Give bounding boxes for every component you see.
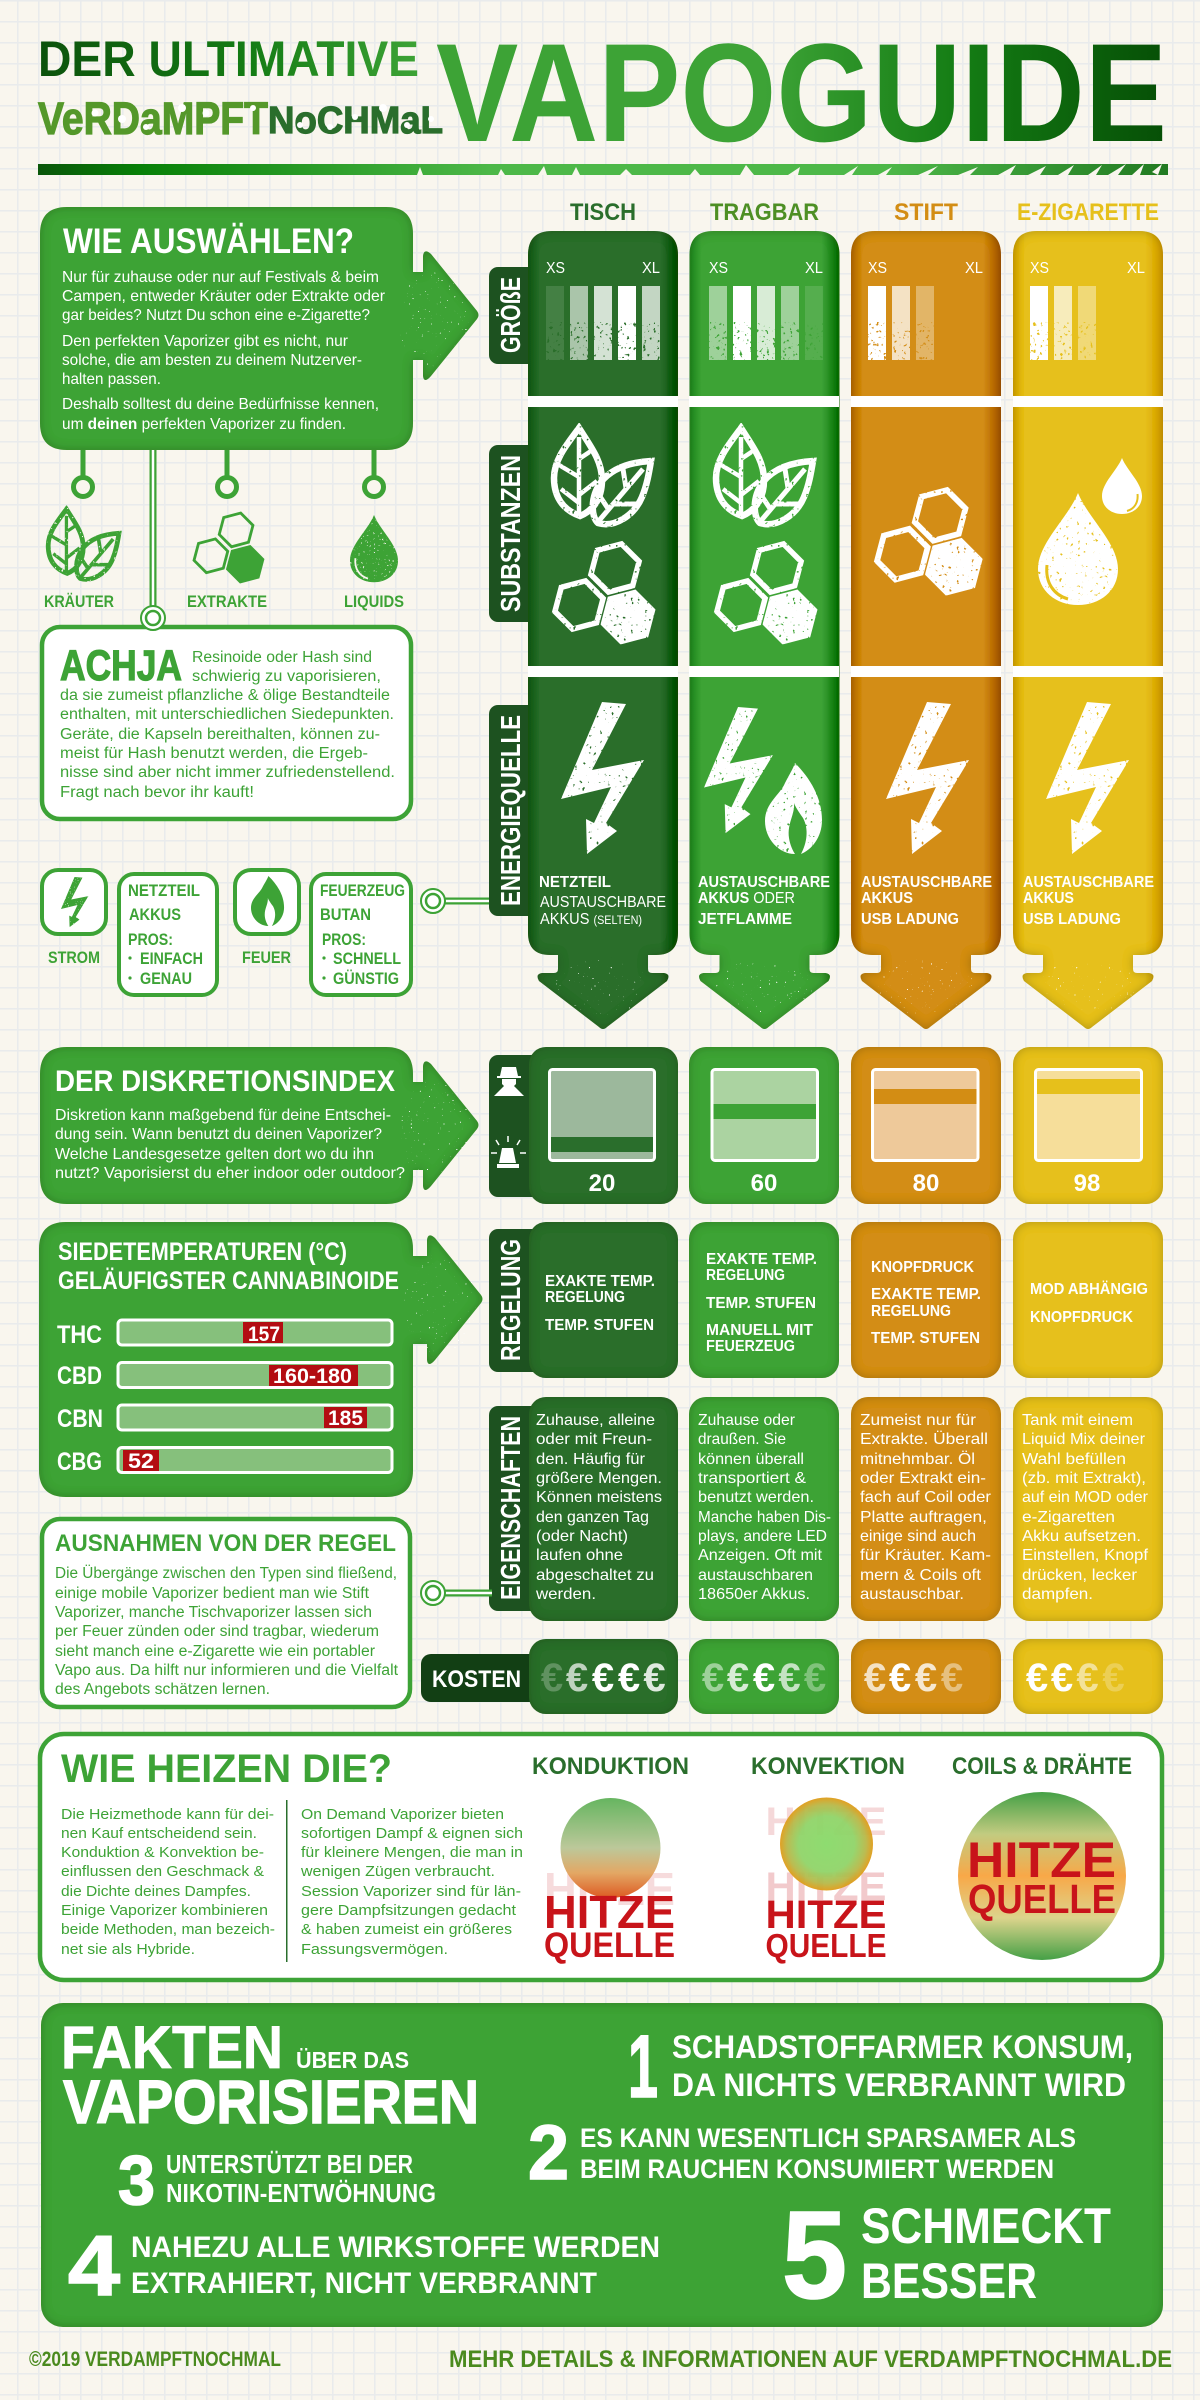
text: e-zigarette: MOD ABHÄNGIG bbox=[1030, 1281, 1148, 1298]
panel: diskretionsindex: Welche Landesgesetze gelten dort wo du ihn bbox=[55, 1146, 374, 1163]
body text: da sie zumeist pflanzliche & ölige Bestandteile bbox=[60, 687, 390, 704]
kosten: stift: € bbox=[864, 1656, 886, 1700]
text: stift: EXAKTE TEMP. bbox=[871, 1286, 981, 1303]
cell: tisch 20: 20 bbox=[589, 1170, 615, 1197]
column: tisch bbox=[528, 231, 678, 1029]
text column left: net sie als Hybride. bbox=[61, 1941, 195, 1958]
discretion cells bbox=[529, 1047, 1163, 1204]
fact 2 bbox=[528, 2110, 1076, 2196]
text: stift: KNOPFDRUCK bbox=[871, 1259, 975, 1276]
bar: cbn 185 bbox=[57, 1405, 392, 1433]
panel: netzteil: AKKUS bbox=[129, 906, 181, 924]
eigenschaften: tragbar: 18650er Akkus. bbox=[698, 1586, 810, 1603]
kosten: e-zigarette: € bbox=[1051, 1656, 1073, 1700]
diagram: konvektion: HITZE bbox=[766, 1800, 886, 1844]
fact 2: ES KANN WESENTLICH SPARSAMER ALS bbox=[580, 2123, 1076, 2153]
eigenschaften: e-zigarette: Liquid Mix deiner bbox=[1022, 1431, 1146, 1448]
column: e-zigarette: XL bbox=[1127, 260, 1145, 277]
text: tisch bbox=[545, 1273, 655, 1334]
label: substanzen: SUBSTANZEN bbox=[495, 455, 526, 612]
bar: cbn 185: 185 bbox=[328, 1407, 363, 1430]
column: tragbar: AKKUS ODER bbox=[698, 890, 795, 907]
fact 4: EXTRAHIERT, NICHT VERBRANNT bbox=[131, 2267, 597, 2300]
text: e-zigarette bbox=[1030, 1281, 1148, 1326]
heading: WIE HEIZEN DIE? bbox=[61, 1747, 392, 1791]
fact 1: DA NICHTS VERBRANNT WIRD bbox=[672, 2067, 1126, 2103]
panel: feuerzeug: BUTAN bbox=[320, 906, 371, 924]
panel: strom: STROM bbox=[48, 949, 100, 967]
column: stift: USB LADUNG bbox=[861, 911, 959, 928]
text column right: On Demand Vaporizer bieten bbox=[301, 1806, 504, 1823]
heading: VAPORISIEREN bbox=[63, 2068, 479, 2136]
panel: ausnahmen von der regel: Die Übergänge zwischen den Typen sind fließend, bbox=[55, 1564, 397, 1582]
text column right: wenigen Zügen verbraucht. bbox=[300, 1863, 495, 1880]
icon: extrakte bbox=[187, 513, 267, 611]
panel: diskretionsindex bbox=[40, 1047, 478, 1204]
kosten: stift bbox=[851, 1639, 1001, 1714]
panel: ausnahmen von der regel: per Feuer zünden oder sind tragbar, wiederum bbox=[55, 1623, 379, 1640]
panel: netzteil: NETZTEIL bbox=[128, 882, 200, 900]
eigenschaften: tragbar bbox=[689, 1397, 839, 1621]
column: e-zigarette: USB LADUNG bbox=[1023, 911, 1121, 928]
eigenschaften: tragbar: können überall bbox=[698, 1451, 804, 1468]
eigenschaften: tisch: größere Mengen. bbox=[536, 1470, 662, 1487]
text column right: & haben zumeist ein größeres bbox=[301, 1921, 512, 1938]
column: tragbar bbox=[689, 231, 840, 1029]
eigenschaften: stift: für Kräuter. Kam- bbox=[860, 1547, 991, 1564]
panel: diskretionsindex: Diskretion kann maßgebend für deine Entschei- bbox=[55, 1107, 391, 1124]
column: tisch: AUSTAUSCHBARE bbox=[540, 894, 666, 911]
title underline bar bbox=[38, 164, 1168, 175]
text column left bbox=[61, 1806, 275, 1958]
column: e-zigarette: AKKUS bbox=[1023, 890, 1074, 907]
cell: e-zigarette 98: 98 bbox=[1074, 1170, 1100, 1197]
icon: extrakte: EXTRAKTE bbox=[187, 592, 267, 611]
text column right: sofortigen Dampf & eignen sich bbox=[301, 1825, 523, 1842]
panel: siedetemperaturen: GELÄUFIGSTER CANNABINOIDE bbox=[58, 1267, 399, 1295]
heading: ÜBER DAS bbox=[296, 2047, 409, 2073]
kosten: tisch: € bbox=[541, 1656, 563, 1700]
eigenschaften: tisch: werden. bbox=[535, 1586, 596, 1603]
text: tisch: EXAKTE TEMP. bbox=[545, 1273, 655, 1290]
fact 2: BEIM RAUCHEN KONSUMIERT WERDEN bbox=[580, 2154, 1054, 2184]
diagram: coils und draehte: QUELLE bbox=[968, 1876, 1116, 1922]
bar: cbg 52 bbox=[57, 1448, 392, 1476]
row tabs bbox=[489, 267, 549, 1611]
bar: cbd 160-180 bbox=[57, 1362, 392, 1390]
icon: liquids bbox=[344, 515, 404, 611]
panel: diskretionsindex: DER DISKRETIONSINDEX bbox=[55, 1065, 395, 1098]
panel: feuerzeug: PROS: bbox=[322, 931, 366, 949]
column headers: TRAGBAR bbox=[710, 199, 819, 226]
text column left: einflussen den Geschmack & bbox=[61, 1863, 264, 1880]
eigenschaften: stift: einige sind auch bbox=[860, 1528, 976, 1545]
kosten: e-zigarette bbox=[1013, 1639, 1163, 1714]
panel: ausnahmen von der regel: einige mobile Vaporizer bedient man wie Stift bbox=[55, 1585, 370, 1602]
arrow specks bbox=[399, 270, 471, 370]
text column left: Konduktion & Konvektion be- bbox=[61, 1844, 264, 1861]
bar: thc 157 bbox=[57, 1320, 392, 1349]
kosten: tisch: € bbox=[566, 1656, 588, 1700]
fact 2: 2 bbox=[528, 2110, 569, 2196]
eigenschaften: tisch bbox=[529, 1397, 678, 1621]
text: tragbar: FEUERZEUG bbox=[706, 1338, 795, 1355]
column: tragbar: JETFLAMME bbox=[698, 911, 792, 928]
eigenschaften: stift: mern & Coils oft bbox=[860, 1567, 982, 1584]
cell: tragbar 60: 60 bbox=[751, 1170, 777, 1197]
eigenschaften: e-zigarette: Einstellen, Knopf bbox=[1022, 1547, 1149, 1564]
kosten: tragbar: € bbox=[702, 1656, 724, 1700]
column: e-zigarette bbox=[1013, 231, 1163, 1029]
panel: wie auswaehlen bbox=[40, 207, 478, 496]
intro text bbox=[62, 269, 386, 433]
cell: stift 80: 80 bbox=[913, 1170, 939, 1197]
fact 5: 5 bbox=[782, 2187, 847, 2325]
eigenschaften: e-zigarette: Wahl befüllen bbox=[1022, 1451, 1126, 1468]
column: tisch: AKKUS (SELTEN) bbox=[540, 911, 642, 928]
text column right: gere Dampfsitzungen gedacht bbox=[301, 1902, 517, 1919]
panel: achja bbox=[42, 606, 411, 819]
text: e-zigarette: KNOPFDRUCK bbox=[1030, 1309, 1134, 1326]
kosten: stift: € bbox=[915, 1656, 937, 1700]
kosten: tisch: € bbox=[618, 1656, 640, 1700]
panel: ausnahmen von der regel: des Angebots schätzen lernen. bbox=[55, 1681, 270, 1698]
fact 4: 4 bbox=[68, 2219, 120, 2314]
icon: agent bbox=[494, 1067, 524, 1096]
eigenschaften: stift bbox=[851, 1397, 1001, 1621]
panel: siedetemperaturen: SIEDETEMPERATUREN (°C) bbox=[58, 1238, 347, 1266]
kosten: stift: € bbox=[941, 1656, 963, 1700]
panel: ausnahmen von der regel: Vapo aus. Da hilft nur informieren und die Vielfalt bbox=[55, 1662, 399, 1679]
intro text: Nur für zuhause oder nur auf Festivals & beim bbox=[62, 269, 379, 286]
intro text: um deinen perfekten Vaporizer zu finden. bbox=[62, 416, 346, 433]
text column right bbox=[300, 1806, 523, 1958]
bar: cbd 160-180: 160-180 bbox=[273, 1365, 352, 1388]
eigenschaften: stift: Extrakte. Überall bbox=[860, 1430, 988, 1448]
eigenschaften: tisch: Können meistens bbox=[536, 1489, 662, 1506]
fact 4 bbox=[68, 2219, 660, 2314]
panel: ausnahmen von der regel: Vaporizer, manche Tischvaporizer lassen sich bbox=[55, 1604, 372, 1621]
logo: verdampftnochmal: NoCHMaL bbox=[268, 100, 443, 142]
icon: kraeuter: KRÄUTER bbox=[44, 592, 114, 611]
body text: Resinoide oder Hash sind bbox=[192, 649, 372, 666]
eigenschaften: tisch: Zuhause, alleine bbox=[536, 1412, 655, 1429]
panel: ausnahmen von der regel: sieht manch eine e-Zigarette wie ein portabler bbox=[55, 1643, 375, 1660]
diagram: coils und draehte bbox=[952, 1753, 1132, 1960]
column: stift: AKKUS bbox=[861, 890, 913, 907]
column: tisch: XS bbox=[546, 260, 565, 277]
text: stift: REGELUNG bbox=[871, 1303, 951, 1320]
kosten: e-zigarette: € bbox=[1102, 1656, 1125, 1700]
column: stift: XS bbox=[868, 260, 887, 277]
kosten: e-zigarette: € bbox=[1026, 1656, 1048, 1700]
fact 3 bbox=[118, 2141, 436, 2219]
panel: diskretionsindex: dung sein. Wann benutzt du deinen Vaporizer? bbox=[55, 1126, 382, 1143]
regelung label: REGELUNG bbox=[495, 1239, 526, 1361]
size bars bbox=[868, 286, 934, 360]
heading: WIE AUSWÄHLEN? bbox=[63, 222, 354, 261]
text column left: nen Kauf entscheidend sein. bbox=[61, 1825, 257, 1842]
size bars bbox=[1030, 286, 1096, 360]
body text: Geräte, die Kapseln bereithalten, können zu- bbox=[60, 726, 380, 743]
eigenschaften: e-zigarette bbox=[1013, 1397, 1163, 1621]
eigenschaften: stift: Zumeist nur für bbox=[860, 1412, 977, 1429]
bar: cbd 160-180: CBD bbox=[57, 1362, 102, 1390]
body text: enthalten, mit unterschiedlichen Siedepunkten. bbox=[60, 706, 394, 723]
text: tisch: REGELUNG bbox=[545, 1289, 625, 1306]
eigenschaften: tisch: abgeschaltet zu bbox=[536, 1567, 654, 1584]
kosten: e-zigarette: € bbox=[1076, 1656, 1099, 1700]
text: tragbar: TEMP. STUFEN bbox=[706, 1295, 816, 1312]
size bars bbox=[709, 286, 823, 360]
eigenschaften: tragbar: Manche haben Dis- bbox=[698, 1509, 831, 1526]
text column right: Session Vaporizer sind für län- bbox=[301, 1883, 521, 1900]
text: tragbar: MANUELL MIT bbox=[706, 1322, 814, 1339]
eigenschaften: stift: fach auf Coil oder bbox=[860, 1489, 992, 1506]
column: tragbar: XS bbox=[709, 260, 728, 277]
kosten: stift: € bbox=[889, 1656, 911, 1700]
body text bbox=[60, 649, 395, 801]
column: tisch: XL bbox=[642, 260, 660, 277]
eigenschaften: tisch: laufen ohne bbox=[536, 1547, 623, 1564]
body text: meist für Hash benutzt werden, die Ergeb- bbox=[60, 745, 368, 762]
column headers: STIFT bbox=[894, 199, 958, 226]
diagram: konduktion: HITZE bbox=[544, 1863, 675, 1915]
column: tragbar: XL bbox=[805, 260, 823, 277]
eigenschaften: tisch: den. Häufig für bbox=[536, 1451, 646, 1468]
label: groesse: GRÖßE bbox=[495, 277, 526, 353]
kosten: tisch: € bbox=[643, 1656, 666, 1700]
cell: e-zigarette 98 bbox=[1013, 1047, 1163, 1204]
diagram: konvektion: QUELLE bbox=[766, 1927, 886, 1964]
connector ring: eigenschaften bbox=[421, 1581, 492, 1605]
column: stift bbox=[851, 231, 1001, 1029]
body text: schwierig zu vaporisieren, bbox=[192, 668, 381, 685]
text: tisch: TEMP. STUFEN bbox=[545, 1317, 654, 1334]
text: tragbar: EXAKTE TEMP. bbox=[706, 1251, 817, 1268]
panel: feuerzeug: SCHNELL bbox=[333, 950, 401, 968]
eigenschaften: tisch: oder mit Freun- bbox=[536, 1431, 652, 1448]
size bars bbox=[546, 286, 660, 360]
text column left: die Dichte deines Dampfes. bbox=[61, 1883, 251, 1900]
panel: feuer bbox=[235, 870, 299, 967]
diagram: konduktion: QUELLE bbox=[544, 1926, 675, 1965]
column: tisch: NETZTEIL bbox=[539, 874, 611, 891]
intro text: Den perfekten Vaporizer gibt es nicht, nur bbox=[62, 333, 349, 350]
eigenschaften: e-zigarette: dampfen. bbox=[1022, 1586, 1093, 1603]
eigenschaften: tragbar: Anzeigen. Oft mit bbox=[698, 1547, 823, 1564]
body text: Fragt nach bevor ihr kauft! bbox=[60, 784, 254, 801]
text: tragbar bbox=[706, 1251, 817, 1355]
fact 1: 1 bbox=[628, 2016, 658, 2116]
eigenschaften: tragbar: austauschbaren bbox=[698, 1567, 813, 1584]
column: e-zigarette: AUSTAUSCHBARE bbox=[1023, 874, 1154, 891]
panel: ausnahmen von der regel bbox=[42, 1519, 410, 1707]
kosten label: KOSTEN bbox=[432, 1666, 521, 1693]
panel: netzteil: PROS: bbox=[128, 931, 173, 949]
intro text: Campen, entweder Kräuter oder Extrakte oder bbox=[62, 288, 386, 305]
body text: nisse sind aber nicht immer zufriedenstellend. bbox=[60, 764, 395, 781]
bar: thc 157: THC bbox=[57, 1321, 102, 1349]
intro text: solche, die am besten zu deinem Nutzerver- bbox=[62, 352, 362, 369]
fact 3: 3 bbox=[118, 2141, 155, 2219]
fact 4: NAHEZU ALLE WIRKSTOFFE WERDEN bbox=[131, 2231, 660, 2264]
panel: siedetemperaturen bbox=[39, 1222, 482, 1497]
fact 3: UNTERSTÜTZT BEI DER bbox=[166, 2149, 413, 2179]
fact 3: NIKOTIN-ENTWÖHNUNG bbox=[166, 2178, 436, 2208]
icon: siren bbox=[491, 1136, 526, 1168]
column headers bbox=[570, 199, 1159, 226]
fact 1: SCHADSTOFFARMER KONSUM, bbox=[672, 2029, 1133, 2065]
panel: netzteil bbox=[119, 874, 217, 995]
eigenschaften: tragbar: draußen. Sie bbox=[698, 1431, 786, 1448]
column headers: TISCH bbox=[570, 199, 636, 226]
intro text: Deshalb solltest du deine Bedürfnisse kennen, bbox=[62, 396, 379, 413]
panel: diskretionsindex: nutzt? Vaporisierst du eher indoor oder outdoor? bbox=[55, 1165, 405, 1182]
diagram: konvektion: KONVEKTION bbox=[751, 1753, 905, 1780]
diagram: konduktion: HITZE bbox=[544, 1886, 675, 1938]
cell: stift 80 bbox=[851, 1047, 1001, 1204]
eigenschaften: stift: austauschbar. bbox=[860, 1586, 964, 1603]
panel: fakten bbox=[41, 2003, 1163, 2327]
regelung cells bbox=[529, 1222, 1163, 1378]
kosten: tragbar: € bbox=[778, 1656, 801, 1700]
panel shape with arrow bbox=[40, 207, 478, 450]
connector: achja bbox=[150, 450, 156, 610]
heading bbox=[61, 2014, 479, 2136]
icon: liquids: LIQUIDS bbox=[344, 592, 404, 611]
intro text: gar beides? Nutzt Du schon eine e-Zigarette? bbox=[62, 307, 370, 324]
title: der ultimative vapoguide bbox=[38, 14, 1167, 171]
eigenschaften: stift: Platte auftragen, bbox=[860, 1509, 987, 1526]
panel: ausnahmen von der regel: AUSNAHMEN VON DER REGEL bbox=[55, 1530, 396, 1557]
eigenschaften: e-zigarette: auf ein MOD oder bbox=[1022, 1489, 1149, 1506]
eigenschaften: e-zigarette: (zb. mit Extrakt), bbox=[1022, 1470, 1146, 1487]
connectors to substances bbox=[74, 448, 384, 496]
logo: verdampftnochmal bbox=[38, 93, 443, 144]
label: energiequelle: ENERGIEQUELLE bbox=[495, 715, 526, 906]
text column right: für kleinere Mengen, die man in bbox=[301, 1844, 523, 1861]
text column right: Fassungsvermögen. bbox=[301, 1941, 448, 1958]
eigenschaften: stift: mitnehmbar. Öl bbox=[860, 1450, 975, 1468]
title: der ultimative vapoguide: DER ULTIMATIVE bbox=[38, 31, 419, 87]
eigenschaften: tragbar: Zuhause oder bbox=[698, 1412, 796, 1429]
bar: cbn 185: CBN bbox=[57, 1405, 103, 1433]
eigenschaften: e-zigarette: e-Zigaretten bbox=[1022, 1509, 1115, 1526]
logo: verdampftnochmal: VeRDaMPFT bbox=[38, 93, 268, 144]
eigenschaften: tragbar: benutzt werden. bbox=[698, 1489, 814, 1506]
panel: feuerzeug bbox=[311, 874, 411, 995]
panel: feuer: FEUER bbox=[242, 949, 291, 967]
column: e-zigarette: XS bbox=[1030, 260, 1049, 277]
fact 5 bbox=[782, 2187, 1111, 2325]
fact 5: SCHMECKT bbox=[861, 2198, 1111, 2254]
diagram: konvektion bbox=[751, 1753, 905, 1964]
diagram: konvektion: HITZE bbox=[766, 1865, 886, 1909]
bar: cbg 52: CBG bbox=[57, 1448, 102, 1476]
bar: thc 157: 157 bbox=[248, 1323, 280, 1346]
eigenschaften: tragbar: transportiert & bbox=[698, 1470, 806, 1487]
panel: feuerzeug: GÜNSTIG bbox=[333, 969, 399, 988]
eigenschaften: e-zigarette: Tank mit einem bbox=[1022, 1412, 1133, 1429]
text column left: beide Methoden, man bezeich- bbox=[61, 1921, 275, 1938]
eigenschaften label: EIGENSCHAFTEN bbox=[495, 1416, 526, 1600]
fact 5: BESSER bbox=[861, 2253, 1037, 2309]
text: stift: TEMP. STUFEN bbox=[871, 1330, 980, 1347]
kosten: tragbar: € bbox=[753, 1656, 775, 1700]
kosten: tragbar bbox=[689, 1639, 839, 1714]
panel: strom bbox=[42, 870, 106, 967]
column: tragbar: AUSTAUSCHBARE bbox=[698, 874, 830, 891]
panel: feuerzeug: FEUERZEUG bbox=[320, 882, 405, 900]
diagram: coils und draehte: COILS & DRÄHTE bbox=[952, 1753, 1132, 1780]
eigenschaften: tragbar: plays, andere LED bbox=[698, 1528, 827, 1545]
bar: cbg 52: 52 bbox=[128, 1450, 154, 1473]
heading: FAKTEN bbox=[61, 2014, 283, 2081]
kosten: tragbar: € bbox=[727, 1656, 749, 1700]
eigenschaften: stift: oder Extrakt ein- bbox=[860, 1470, 986, 1487]
eigenschaften: e-zigarette: Akku aufsetzen. bbox=[1022, 1528, 1141, 1545]
diagram: konvektion: HITZE bbox=[766, 1893, 886, 1937]
column headers: E-ZIGARETTE bbox=[1017, 199, 1159, 226]
diagram: coils und draehte: HITZE bbox=[967, 1832, 1116, 1888]
fact 1 bbox=[628, 2016, 1133, 2116]
text: stift bbox=[871, 1259, 981, 1347]
kosten: tisch: € bbox=[592, 1656, 614, 1700]
panel: wie heizen die bbox=[40, 1734, 1162, 1980]
text column left: Die Heizmethode kann für dei- bbox=[61, 1806, 274, 1823]
panel: netzteil: EINFACH bbox=[140, 950, 203, 968]
diagram: konduktion bbox=[532, 1753, 689, 1965]
eigenschaften: e-zigarette: drücken, lecker bbox=[1022, 1567, 1138, 1584]
text column left: Einige Vaporizer kombinieren bbox=[61, 1902, 268, 1919]
eigenschaften: tisch: (oder Nacht) bbox=[536, 1528, 628, 1545]
footer: copyright: ©2019 VERDAMPFTNOCHMAL bbox=[29, 2348, 281, 2371]
column: stift: XL bbox=[965, 260, 983, 277]
eigenschaften: tisch: den ganzen Tag bbox=[536, 1509, 649, 1526]
cell: tisch 20 bbox=[529, 1047, 678, 1204]
icon: kraeuter bbox=[44, 509, 119, 611]
heading: ACHJA bbox=[60, 642, 182, 690]
kosten: tisch bbox=[529, 1639, 678, 1714]
cell: tragbar 60 bbox=[689, 1047, 839, 1204]
kosten label bbox=[421, 1654, 551, 1702]
kosten: tragbar: € bbox=[804, 1656, 826, 1700]
panel: netzteil: GENAU bbox=[140, 970, 192, 988]
text: tragbar: REGELUNG bbox=[706, 1267, 785, 1284]
column: stift: AUSTAUSCHBARE bbox=[861, 874, 992, 891]
diagram: konduktion: KONDUKTION bbox=[532, 1753, 689, 1780]
connector ring: energiequelle bbox=[421, 889, 492, 913]
intro text: halten passen. bbox=[62, 371, 161, 388]
